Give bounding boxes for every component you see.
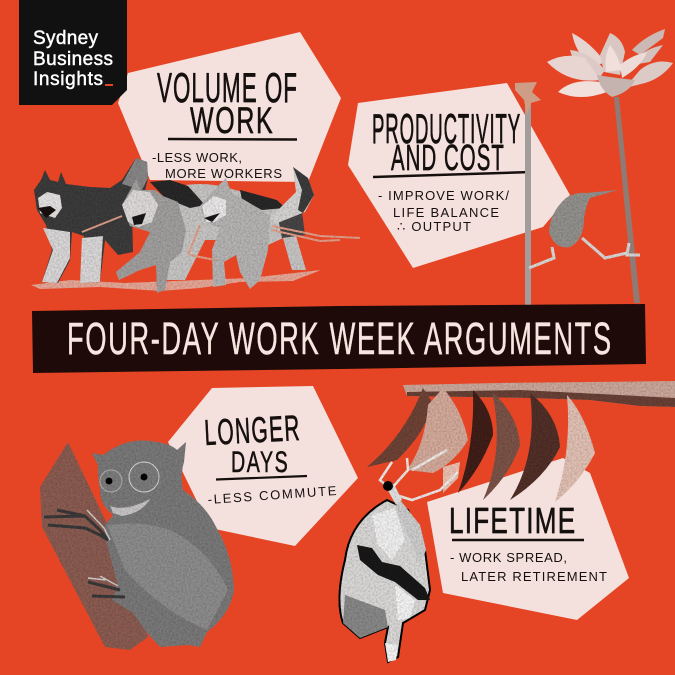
illustration: butterfly [339, 450, 458, 662]
title text: FOUR-DAY WORK WEEK ARGUMENTS [67, 313, 611, 364]
text: improve work/life balance, output: ∴ OUTPUT [397, 219, 471, 234]
chrysalis 6 [555, 395, 595, 502]
stem: tall [614, 97, 640, 303]
panel: lifetime [427, 458, 629, 620]
logo: Sydney Business Insights: Business [33, 49, 113, 70]
text: less work, more workers: -LESS WORK, [152, 150, 242, 165]
heading: volume of work [157, 66, 297, 141]
illustration: tarsier [40, 441, 234, 650]
seed head [515, 82, 541, 115]
illustration: sled dogs [31, 158, 360, 293]
panel: volume of work [118, 32, 341, 182]
dog: middle [116, 179, 186, 293]
text: less commute: -LESS COMMUTE [207, 483, 337, 507]
heading: volume of work: WORK [190, 100, 273, 141]
chrysalis 2 [407, 388, 468, 473]
bird [529, 190, 640, 268]
title bar [32, 304, 646, 373]
heading: volume of work: VOLUME OF [157, 66, 297, 112]
text: improve work/life balance, output: - IMPROVE WORK/ [378, 188, 509, 203]
heading: productivity and cost [372, 106, 531, 179]
text: less work, more workers [152, 150, 282, 181]
text: less work, more workers: MORE WORKERS [165, 166, 282, 181]
dog: back pair [165, 184, 306, 280]
ground [31, 270, 321, 291]
eye left [100, 470, 122, 492]
heading: longer days [203, 408, 307, 480]
text: work spread, later retirement: LATER RETIREMENT [461, 569, 607, 584]
harness ropes [82, 216, 360, 260]
legs [380, 450, 458, 500]
illustration: chrysalises on branch [367, 381, 675, 502]
tarsier body [92, 441, 234, 647]
chrysalis 1 [367, 388, 432, 467]
panel: productivity and cost [348, 83, 570, 268]
text: improve work/life balance, output: LIFE BALANCE [393, 205, 499, 220]
text: work spread, later retirement [450, 550, 607, 584]
logo: Sydney Business Insights: Insights [33, 69, 103, 90]
illustration: lotus and stalk [515, 29, 673, 307]
panel: longer days [168, 386, 358, 546]
body [396, 497, 426, 565]
wing [339, 500, 430, 662]
heading: longer days: LONGER [203, 408, 301, 454]
heading: lifetime: LIFETIME [449, 501, 575, 541]
dog: left [34, 158, 148, 283]
dog: right [200, 167, 314, 289]
text: work spread, later retirement: - WORK SPREAD, [450, 550, 567, 565]
chrysalis 4 [483, 392, 520, 500]
wing band [357, 545, 430, 600]
heading: longer days: DAYS [231, 446, 288, 479]
chrysalis 3 [458, 390, 493, 493]
text: improve work/life balance, output [378, 188, 509, 234]
lotus flower [547, 29, 673, 97]
hands [44, 510, 125, 597]
eye right [129, 462, 159, 492]
face [110, 499, 150, 516]
logo: Sydney Business Insights [19, 0, 127, 105]
heading: productivity and cost: AND COST [391, 139, 504, 179]
stem: short [525, 103, 531, 307]
heading: productivity and cost: PRODUCTIVITY [372, 106, 520, 152]
branch [403, 381, 675, 407]
logo: Sydney Business Insights: Sydney [33, 28, 98, 49]
chrysalis 5 [510, 393, 560, 500]
tree branch [40, 442, 148, 650]
